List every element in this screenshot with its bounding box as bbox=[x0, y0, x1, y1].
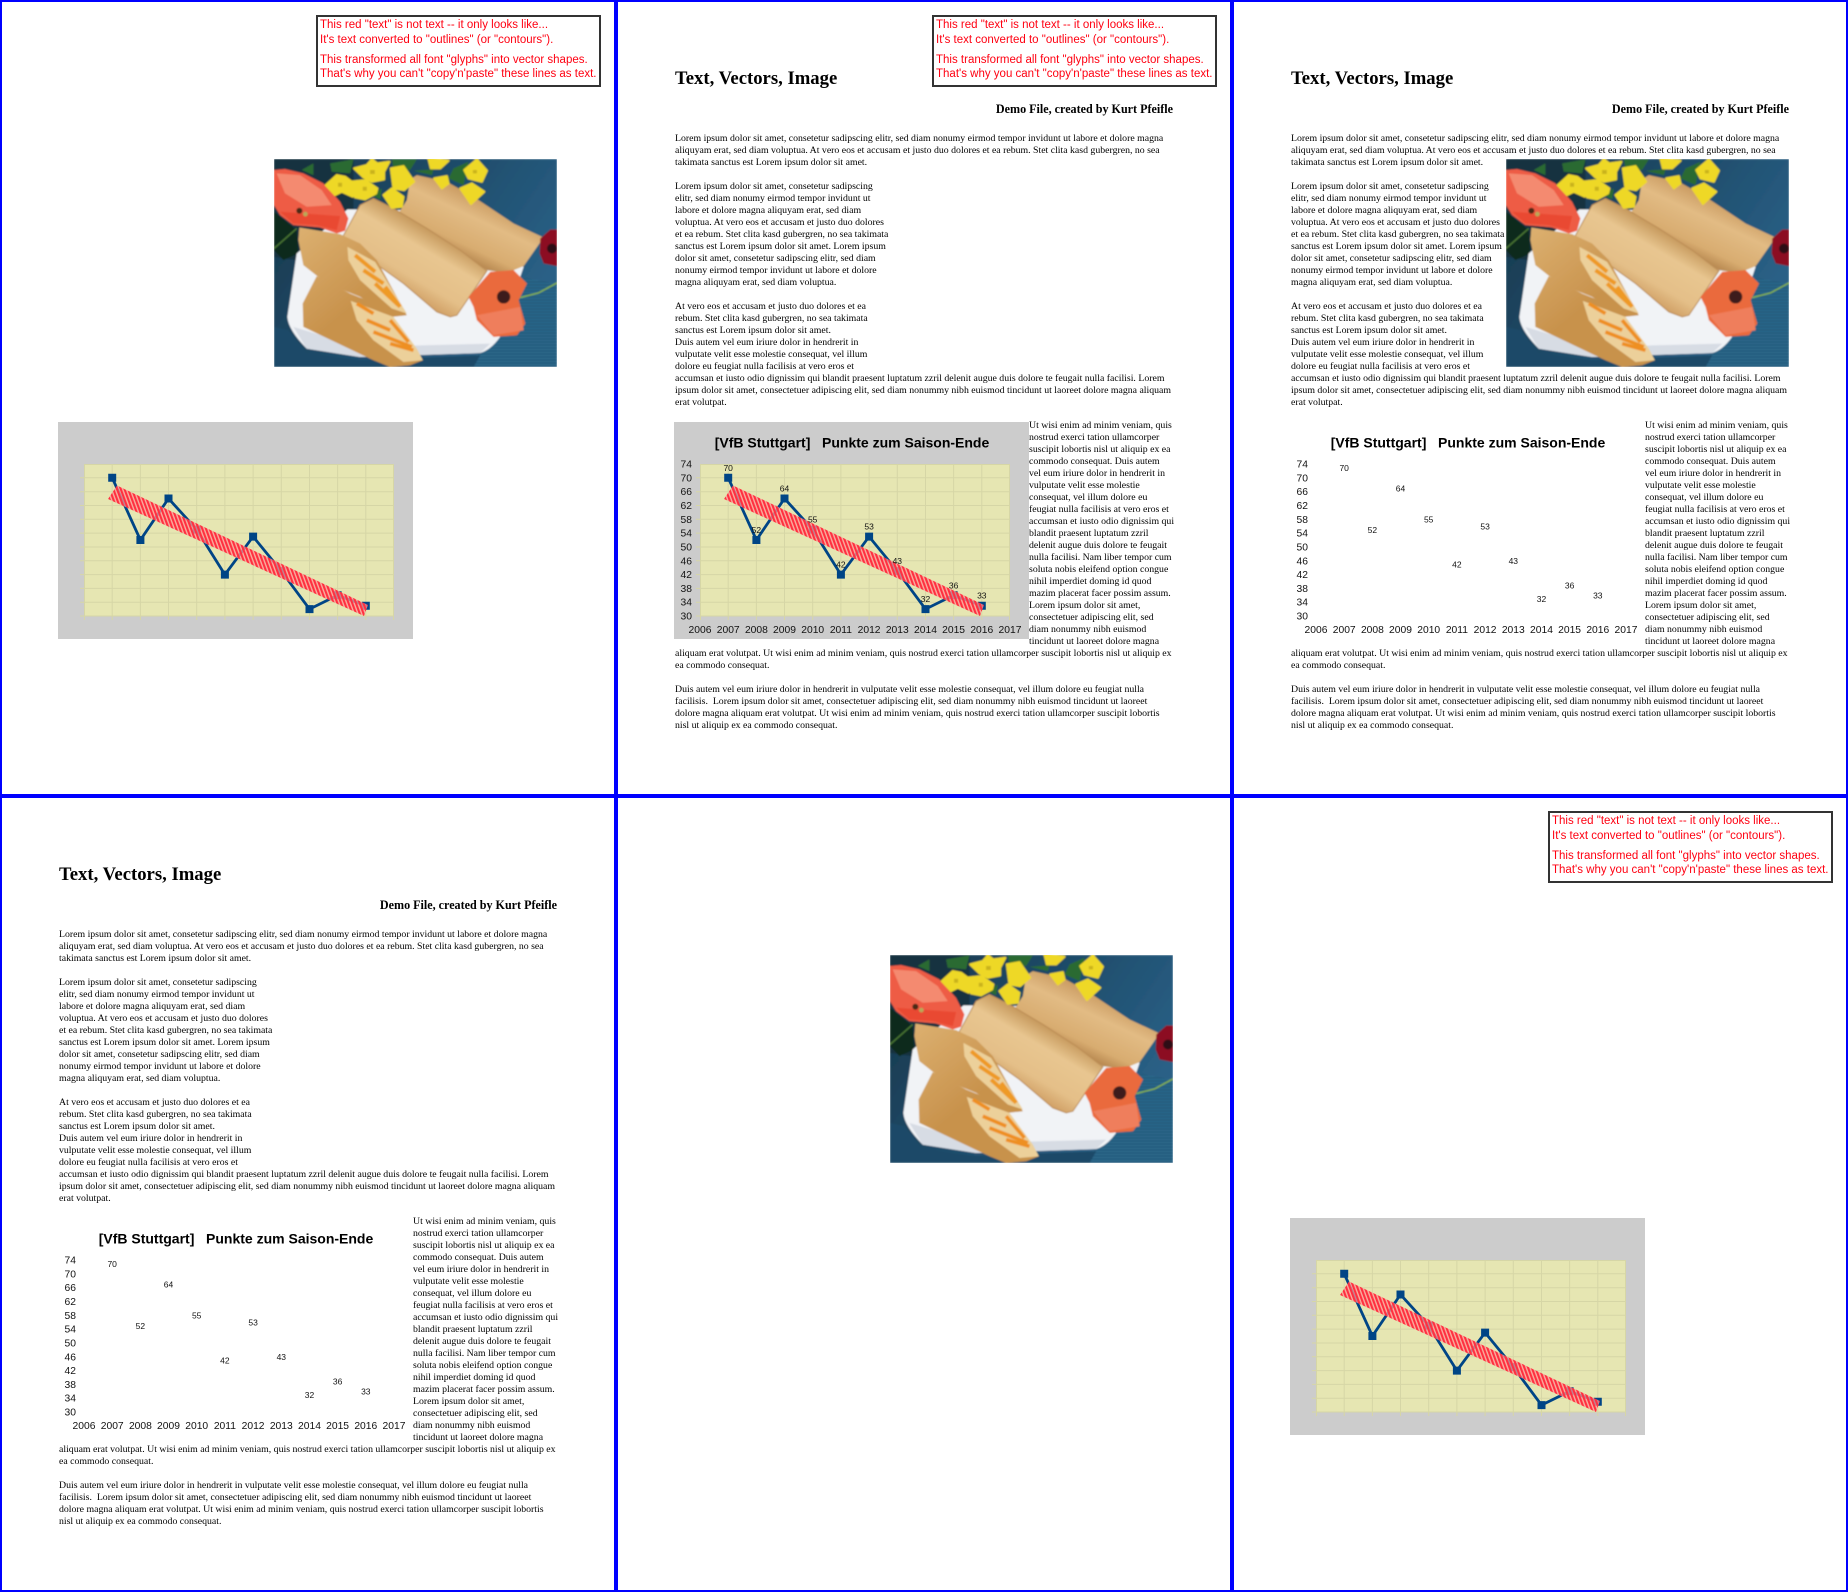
chart: full with text: 36 bbox=[949, 580, 959, 590]
text block: main paragraphs: Lorem ipsum dolor sit amet, consetetur sadipscing elitr, sed diam nonumy eirmod tempor invidunt ut labore et dolore magna aliquyam erat, sed diam voluptua. At vero eos et accusam et justo duo dolores et ea rebum. Stet clita kasd gubergren, no sea takimata sanctus est Lorem ipsum dolor sit amet. Lorem ipsum dolor sit amet, consetetur sadipscing elitr, sed diam nonumy eirmod tempor invidunt ut labore et dolore magna aliquyam erat, sed diam voluptua. At vero eos et accusam et justo duo dolores et ea rebum. Stet clita kasd gubergren, no sea takimata sanctus est Lorem ipsum dolor sit amet. Lorem ipsum dolor sit amet, consetetur sadipscing elitr, sed diam nonumy eirmod tempor invidunt ut labore et dolore magna aliquyam erat, sed diam voluptua. At vero eos et accusam et justo duo dolores et ea rebum. Stet clita kasd gubergren, no sea takimata sanctus est Lorem ipsum dolor sit amet. Duis autem vel eum iriure dolor in hendrerit in vulputate velit esse molestie consequat, vel illum dolore eu feugiat nulla facilisis at vero eros et accumsan et iusto odio dignissim qui blandit praesent luptatum zzril delenit augue duis dolore te feugait nulla facilisi. Lorem ipsum dolor sit amet, consectetuer adipiscing elit, sed diam nonummy nibh euismod tincidunt ut laoreet dolore magna aliquam erat volutpat. bbox=[1291, 133, 1787, 408]
chart: full with text: 32 bbox=[921, 594, 930, 604]
callout: outlined text: That's why you can't "copy'n'paste" these lines as text. bbox=[1552, 864, 1828, 876]
chart: full with text: 2007 bbox=[717, 625, 740, 636]
chart: text only: 30 bbox=[1297, 612, 1308, 622]
chart: full with text: 42 bbox=[836, 560, 846, 570]
chart: text only: 70 bbox=[65, 1269, 76, 1280]
chart: full with text: 70 bbox=[681, 473, 692, 484]
chart: full with text: 2017 bbox=[999, 625, 1022, 636]
chart: text only: 2010 bbox=[185, 1421, 208, 1432]
panel: page 4 bbox=[0, 796, 616, 1592]
chart: full with text: 52 bbox=[752, 525, 761, 535]
chart: text only: 2006 bbox=[73, 1421, 96, 1432]
chart: text only: 50 bbox=[1297, 542, 1308, 554]
callout: outlined text: That's why you can't "copy'n'paste" these lines as text. bbox=[936, 68, 1212, 80]
callout: outlined text bbox=[316, 15, 601, 87]
chart: text only: 46 bbox=[65, 1352, 76, 1363]
subheading: Demo File, created by Kurt Pfeifle bbox=[996, 102, 1173, 116]
chart: full with text: 38 bbox=[681, 584, 692, 595]
chart: text only: 43 bbox=[277, 1352, 286, 1362]
chart: text only: 38 bbox=[65, 1380, 76, 1391]
text block: closing paragraphs: aliquam erat volutpat. Ut wisi enim ad minim veniam, quis nostrud exerci tation ullamcorper suscipit lobortis nisl ut aliquip ex ea commodo consequat. Duis autem vel eum iriure dolor in hendrerit in vulputate velit esse molestie consequat, vel illum dolore eu feugiat nulla facilisis. Lorem ipsum dolor sit amet, consectetuer adipiscing elit, sed diam nonummy nibh euismod tincidunt ut laoreet dolore magna aliquam erat volutpat. Ut wisi enim ad minim veniam, quis nostrud exerci tation ullamcorper suscipit lobortis nisl ut aliquip ex ea commodo consequat. bbox=[59, 1444, 556, 1527]
chart: text only: [VfB Stuttgart] Punkte zum Saison-Ende bbox=[99, 1230, 373, 1246]
chart: text only: 42 bbox=[220, 1356, 230, 1366]
callout: outlined text bbox=[932, 15, 1217, 87]
chart: full with text: 2014 bbox=[914, 625, 937, 636]
chart: full with text bbox=[674, 422, 1029, 639]
heading: Text, Vectors, Image bbox=[59, 864, 221, 885]
chart: text only: 34 bbox=[65, 1394, 76, 1405]
panel: page 5 bbox=[616, 796, 1232, 1592]
chart: full with text: 2015 bbox=[942, 625, 965, 636]
chart: text only: 74 bbox=[1297, 460, 1308, 470]
chart: text only: 36 bbox=[333, 1376, 343, 1386]
chart: text only: 2008 bbox=[129, 1421, 152, 1432]
chart: text only: 2008 bbox=[1361, 625, 1384, 636]
chart: text only: 53 bbox=[1480, 522, 1490, 532]
chart: full with text: 2013 bbox=[886, 625, 909, 636]
callout: outlined text: This transformed all font "glyphs" into vector shapes. bbox=[1552, 850, 1820, 862]
panel: page 6 bbox=[1232, 796, 1848, 1592]
chart: text only: 2015 bbox=[326, 1421, 349, 1432]
chart: text only: 2011 bbox=[1446, 625, 1468, 636]
chart: text only: 46 bbox=[1297, 556, 1308, 567]
subheading: Demo File, created by Kurt Pfeifle bbox=[1612, 102, 1789, 116]
chart: text only: 62 bbox=[1297, 501, 1308, 512]
chart: full with text: 55 bbox=[808, 515, 818, 525]
chart: text only: 2016 bbox=[354, 1421, 378, 1432]
chart: full with text: 42 bbox=[681, 570, 692, 581]
text block: right column: Ut wisi enim ad minim veniam, quis nostrud exerci tation ullamcorper suscipit lobortis nisl ut aliquip ex ea commodo consequat. Duis autem vel eum iriure dolor in hendrerit in vulputate velit esse molestie consequat, vel illum dolore eu feugiat nulla facilisis at vero eros et accumsan et iusto odio dignissim qui blandit praesent luptatum zzril delenit augue duis dolore te feugait nulla facilisi. Nam liber tempor cum soluta nobis eleifend option congue nihil imperdiet doming id quod mazim placerat facer possim assum. Lorem ipsum dolor sit amet, consectetuer adipiscing elit, sed diam nonummy nibh euismod tincidunt ut laoreet dolore magna bbox=[413, 1216, 558, 1443]
chart: text only: 64 bbox=[1396, 484, 1405, 494]
chart: text only: 42 bbox=[1297, 570, 1308, 581]
chart: full with text: 2011 bbox=[830, 625, 852, 636]
chart: text only: 2017 bbox=[1615, 625, 1638, 636]
chart: text only: 62 bbox=[65, 1297, 76, 1308]
chart: text only: 50 bbox=[65, 1338, 76, 1350]
chart: text only: 2017 bbox=[383, 1421, 406, 1432]
chart: text only: 42 bbox=[65, 1366, 76, 1377]
text block: main paragraphs: Lorem ipsum dolor sit amet, consetetur sadipscing elitr, sed diam nonumy eirmod tempor invidunt ut labore et dolore magna aliquyam erat, sed diam voluptua. At vero eos et accusam et justo duo dolores et ea rebum. Stet clita kasd gubergren, no sea takimata sanctus est Lorem ipsum dolor sit amet. Lorem ipsum dolor sit amet, consetetur sadipscing elitr, sed diam nonumy eirmod tempor invidunt ut labore et dolore magna aliquyam erat, sed diam voluptua. At vero eos et accusam et justo duo dolores et ea rebum. Stet clita kasd gubergren, no sea takimata sanctus est Lorem ipsum dolor sit amet. Lorem ipsum dolor sit amet, consetetur sadipscing elitr, sed diam nonumy eirmod tempor invidunt ut labore et dolore magna aliquyam erat, sed diam voluptua. At vero eos et accusam et justo duo dolores et ea rebum. Stet clita kasd gubergren, no sea takimata sanctus est Lorem ipsum dolor sit amet. Duis autem vel eum iriure dolor in hendrerit in vulputate velit esse molestie consequat, vel illum dolore eu feugiat nulla facilisis at vero eros et accumsan et iusto odio dignissim qui blandit praesent luptatum zzril delenit augue duis dolore te feugait nulla facilisi. Lorem ipsum dolor sit amet, consectetuer adipiscing elit, sed diam nonummy nibh euismod tincidunt ut laoreet dolore magna aliquam erat volutpat. bbox=[675, 133, 1171, 408]
chart: text only: 2007 bbox=[1333, 625, 1356, 636]
chart: text only: 2013 bbox=[270, 1421, 293, 1432]
text block: right column: Ut wisi enim ad minim veniam, quis nostrud exerci tation ullamcorper suscipit lobortis nisl ut aliquip ex ea commodo consequat. Duis autem vel eum iriure dolor in hendrerit in vulputate velit esse molestie consequat, vel illum dolore eu feugiat nulla facilisis at vero eros et accumsan et iusto odio dignissim qui blandit praesent luptatum zzril delenit augue duis dolore te feugait nulla facilisi. Nam liber tempor cum soluta nobis eleifend option congue nihil imperdiet doming id quod mazim placerat facer possim assum. Lorem ipsum dolor sit amet, consectetuer adipiscing elit, sed diam nonummy nibh euismod tincidunt ut laoreet dolore magna bbox=[1645, 420, 1790, 647]
chart: text only: 2007 bbox=[101, 1421, 124, 1432]
subheading: Demo File, created by Kurt Pfeifle bbox=[380, 898, 557, 912]
heading: Text, Vectors, Image bbox=[1291, 68, 1453, 89]
chart: text only: 33 bbox=[361, 1387, 371, 1397]
callout: outlined text: It's text converted to "outlines" (or "contours"). bbox=[936, 34, 1169, 46]
chart: full with text: 2016 bbox=[970, 625, 994, 636]
chart: full with text: 2009 bbox=[773, 625, 796, 636]
chart: text only: 33 bbox=[1593, 591, 1603, 601]
chart: text only: 2009 bbox=[1389, 625, 1412, 636]
chart: text only: 2013 bbox=[1502, 625, 1525, 636]
heading: Text, Vectors, Image bbox=[675, 68, 837, 89]
chart: text only: [VfB Stuttgart] Punkte zum Saison-Ende bbox=[1331, 434, 1605, 450]
chart: full with text: 54 bbox=[681, 529, 692, 540]
chart: text only: 54 bbox=[65, 1325, 76, 1336]
chart: text only: 55 bbox=[1424, 515, 1434, 525]
panel: page 1 bbox=[0, 0, 616, 796]
chart: text only: 70 bbox=[1339, 463, 1349, 473]
chart: full with text: 2012 bbox=[858, 625, 881, 636]
text block: closing paragraphs: aliquam erat volutpat. Ut wisi enim ad minim veniam, quis nostrud exerci tation ullamcorper suscipit lobortis nisl ut aliquip ex ea commodo consequat. Duis autem vel eum iriure dolor in hendrerit in vulputate velit esse molestie consequat, vel illum dolore eu feugiat nulla facilisis. Lorem ipsum dolor sit amet, consectetuer adipiscing elit, sed diam nonummy nibh euismod tincidunt ut laoreet dolore magna aliquam erat volutpat. Ut wisi enim ad minim veniam, quis nostrud exerci tation ullamcorper suscipit lobortis nisl ut aliquip ex ea commodo consequat. bbox=[1291, 648, 1788, 731]
chart: text only: 2015 bbox=[1558, 625, 1581, 636]
chart: text only: 58 bbox=[1297, 515, 1308, 526]
chart: text only: 32 bbox=[305, 1390, 314, 1400]
chart: full with text: 2010 bbox=[801, 625, 824, 636]
chart: full with text: 53 bbox=[864, 522, 874, 532]
callout: outlined text: That's why you can't "copy'n'paste" these lines as text. bbox=[320, 68, 596, 80]
chart: text only: 66 bbox=[1297, 487, 1308, 498]
chart: full with text: 74 bbox=[681, 460, 692, 470]
chart: text only: 2016 bbox=[1586, 625, 1610, 636]
chart: text only: 58 bbox=[65, 1311, 76, 1322]
chart: text only: 74 bbox=[65, 1256, 76, 1266]
chart: text only: 2012 bbox=[1474, 625, 1497, 636]
chart: full with text: 33 bbox=[977, 591, 987, 601]
chart: text only: 32 bbox=[1537, 594, 1546, 604]
callout: outlined text: This transformed all font "glyphs" into vector shapes. bbox=[936, 54, 1204, 66]
chart: text only bbox=[1296, 434, 1638, 636]
chart: text only: 2014 bbox=[298, 1421, 321, 1432]
chart: text only: 2006 bbox=[1305, 625, 1328, 636]
image: spring rolls photo bbox=[890, 955, 1173, 1163]
callout: outlined text: It's text converted to "outlines" (or "contours"). bbox=[320, 34, 553, 46]
chart: text only: 2014 bbox=[1530, 625, 1553, 636]
callout: outlined text: This red "text" is not text -- it only looks like... bbox=[936, 19, 1164, 31]
chart: full with text: 30 bbox=[681, 612, 692, 622]
chart: full with text: 43 bbox=[893, 556, 902, 566]
panel: page 2 bbox=[616, 0, 1232, 796]
callout: outlined text: This red "text" is not text -- it only looks like... bbox=[320, 19, 548, 31]
chart: text only: 66 bbox=[65, 1283, 76, 1294]
image: spring rolls photo bbox=[274, 159, 557, 367]
chart: full with text: 70 bbox=[723, 463, 733, 473]
chart: text only: 2012 bbox=[242, 1421, 265, 1432]
chart: full with text: 2006 bbox=[689, 625, 712, 636]
chart: full with text: 58 bbox=[681, 515, 692, 526]
callout: outlined text bbox=[1548, 811, 1833, 883]
chart: text only: 54 bbox=[1297, 529, 1308, 540]
image: spring rolls photo bbox=[1506, 159, 1789, 367]
chart: text only: 34 bbox=[1297, 598, 1308, 609]
chart: text only: 38 bbox=[1297, 584, 1308, 595]
callout: outlined text: This transformed all font "glyphs" into vector shapes. bbox=[320, 54, 588, 66]
text block: right column: Ut wisi enim ad minim veniam, quis nostrud exerci tation ullamcorper suscipit lobortis nisl ut aliquip ex ea commodo consequat. Duis autem vel eum iriure dolor in hendrerit in vulputate velit esse molestie consequat, vel illum dolore eu feugiat nulla facilisis at vero eros et accumsan et iusto odio dignissim qui blandit praesent luptatum zzril delenit augue duis dolore te feugait nulla facilisi. Nam liber tempor cum soluta nobis eleifend option congue nihil imperdiet doming id quod mazim placerat facer possim assum. Lorem ipsum dolor sit amet, consectetuer adipiscing elit, sed diam nonummy nibh euismod tincidunt ut laoreet dolore magna bbox=[1029, 420, 1174, 647]
chart: text only: 53 bbox=[248, 1318, 258, 1328]
chart: full with text: 34 bbox=[681, 598, 692, 609]
text block: closing paragraphs: aliquam erat volutpat. Ut wisi enim ad minim veniam, quis nostrud exerci tation ullamcorper suscipit lobortis nisl ut aliquip ex ea commodo consequat. Duis autem vel eum iriure dolor in hendrerit in vulputate velit esse molestie consequat, vel illum dolore eu feugiat nulla facilisis. Lorem ipsum dolor sit amet, consectetuer adipiscing elit, sed diam nonummy nibh euismod tincidunt ut laoreet dolore magna aliquam erat volutpat. Ut wisi enim ad minim veniam, quis nostrud exerci tation ullamcorper suscipit lobortis nisl ut aliquip ex ea commodo consequat. bbox=[675, 648, 1172, 731]
chart: text only: 42 bbox=[1452, 560, 1462, 570]
callout: outlined text: It's text converted to "outlines" (or "contours"). bbox=[1552, 830, 1785, 842]
chart: text only: 36 bbox=[1565, 580, 1575, 590]
chart: full with text: 2008 bbox=[745, 625, 768, 636]
chart: full with text: 64 bbox=[780, 484, 789, 494]
chart: full with text: 46 bbox=[681, 556, 692, 567]
chart: text only: 55 bbox=[192, 1311, 202, 1321]
chart: full with text: 62 bbox=[681, 501, 692, 512]
chart: text only: 70 bbox=[107, 1259, 117, 1269]
chart: text only: 43 bbox=[1509, 556, 1518, 566]
chart: text only: 30 bbox=[65, 1408, 76, 1418]
chart: text only: 70 bbox=[1297, 473, 1308, 484]
chart: vector graphics only bbox=[1290, 1218, 1645, 1435]
callout: outlined text: This red "text" is not text -- it only looks like... bbox=[1552, 815, 1780, 827]
chart: text only: 64 bbox=[164, 1280, 173, 1290]
chart: text only: 52 bbox=[136, 1321, 145, 1331]
chart: text only: 2010 bbox=[1417, 625, 1440, 636]
panel: page 3 bbox=[1232, 0, 1848, 796]
chart: full with text: [VfB Stuttgart] Punkte zum Saison-Ende bbox=[715, 434, 989, 450]
chart: text only: 2009 bbox=[157, 1421, 180, 1432]
chart: vector graphics only bbox=[58, 422, 413, 639]
chart: text only bbox=[64, 1230, 406, 1432]
text block: main paragraphs: Lorem ipsum dolor sit amet, consetetur sadipscing elitr, sed diam nonumy eirmod tempor invidunt ut labore et dolore magna aliquyam erat, sed diam voluptua. At vero eos et accusam et justo duo dolores et ea rebum. Stet clita kasd gubergren, no sea takimata sanctus est Lorem ipsum dolor sit amet. Lorem ipsum dolor sit amet, consetetur sadipscing elitr, sed diam nonumy eirmod tempor invidunt ut labore et dolore magna aliquyam erat, sed diam voluptua. At vero eos et accusam et justo duo dolores et ea rebum. Stet clita kasd gubergren, no sea takimata sanctus est Lorem ipsum dolor sit amet. Lorem ipsum dolor sit amet, consetetur sadipscing elitr, sed diam nonumy eirmod tempor invidunt ut labore et dolore magna aliquyam erat, sed diam voluptua. At vero eos et accusam et justo duo dolores et ea rebum. Stet clita kasd gubergren, no sea takimata sanctus est Lorem ipsum dolor sit amet. Duis autem vel eum iriure dolor in hendrerit in vulputate velit esse molestie consequat, vel illum dolore eu feugiat nulla facilisis at vero eros et accumsan et iusto odio dignissim qui blandit praesent luptatum zzril delenit augue duis dolore te feugait nulla facilisi. Lorem ipsum dolor sit amet, consectetuer adipiscing elit, sed diam nonummy nibh euismod tincidunt ut laoreet dolore magna aliquam erat volutpat. bbox=[59, 929, 555, 1204]
chart: full with text: 50 bbox=[681, 542, 692, 554]
chart: text only: 52 bbox=[1368, 525, 1377, 535]
chart: full with text: 66 bbox=[681, 487, 692, 498]
chart: text only: 2011 bbox=[214, 1421, 236, 1432]
